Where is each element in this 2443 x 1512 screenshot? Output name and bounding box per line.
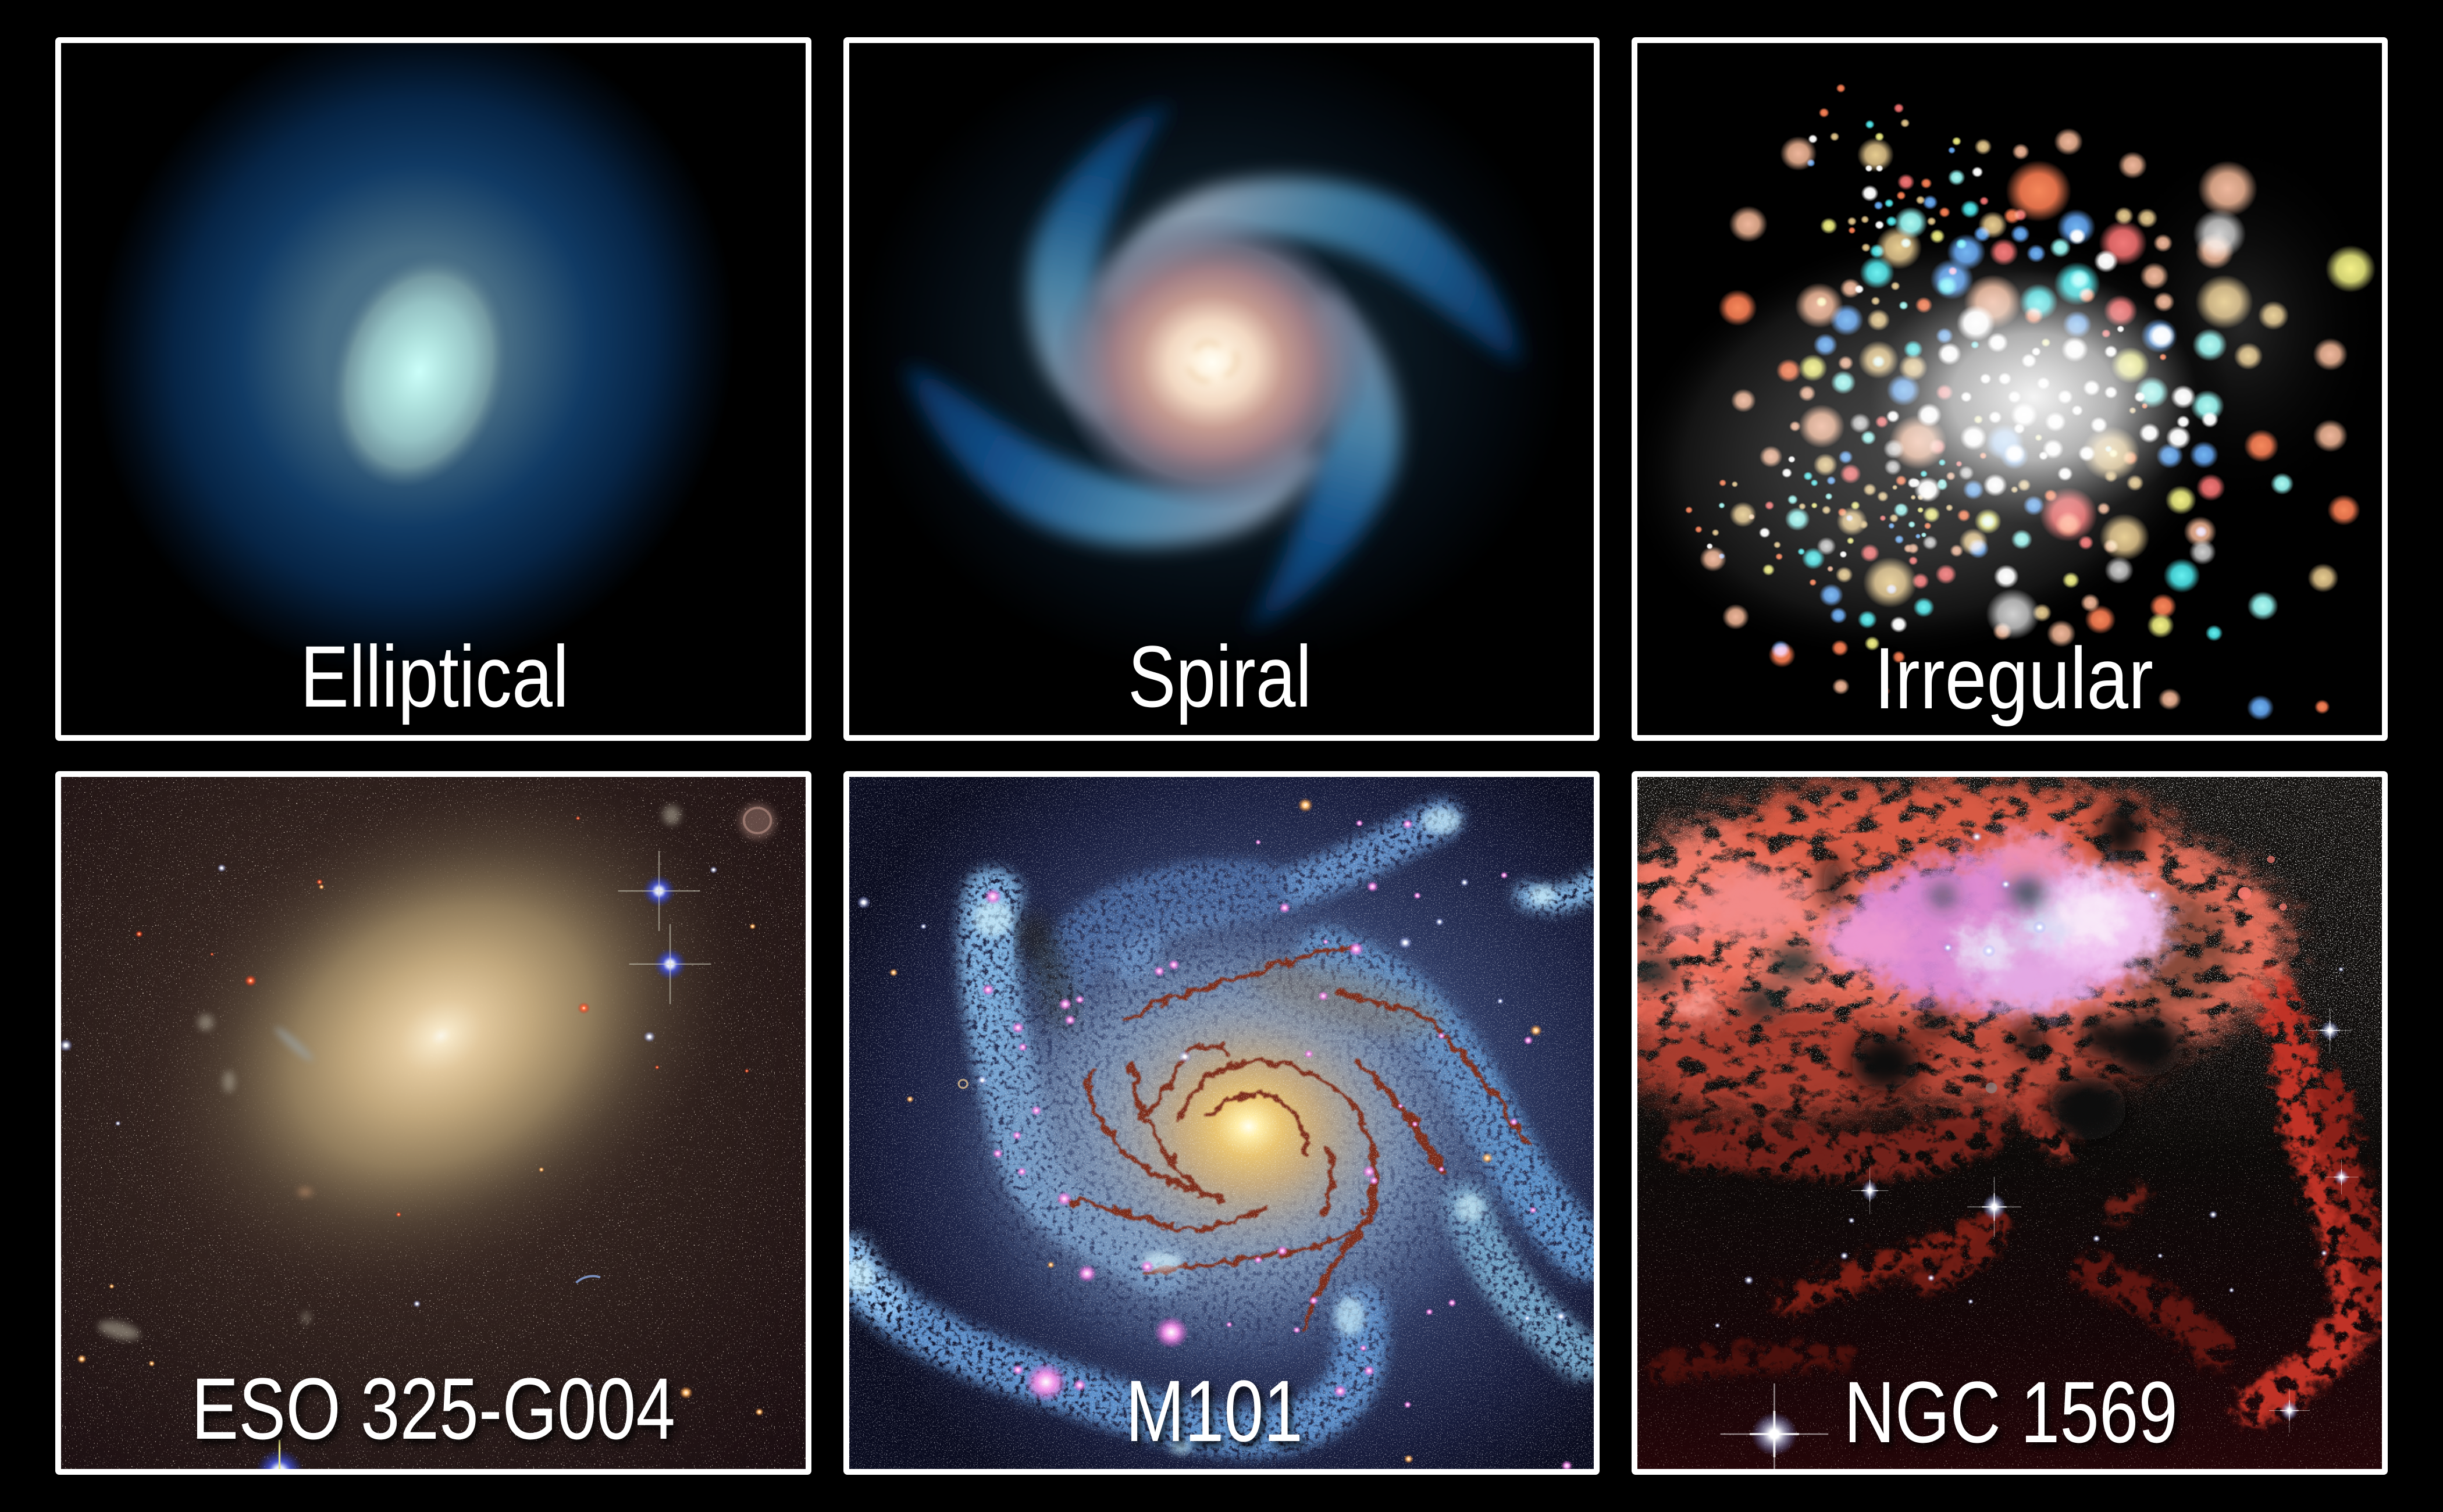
blue foreground stars [618, 851, 700, 931]
label: Irregular: Irregular [1874, 629, 2153, 727]
frame [58, 40, 809, 738]
frame [846, 774, 1597, 1472]
frame [58, 774, 809, 1472]
label: M101: M101 [1126, 1362, 1303, 1460]
panel: NGC 1569 photo [1557, 774, 2385, 1485]
panel: M101 photo [845, 774, 1597, 1472]
label: NGC 1569: NGC 1569 [1844, 1363, 2178, 1461]
label: ESO 325-G004: ESO 325-G004 [191, 1360, 675, 1457]
dark dust patch [1027, 918, 1070, 1027]
coral nebula [1557, 783, 2291, 1122]
dark gaps [1630, 805, 2184, 1140]
photo: pinwheel spiral galaxy [845, 798, 1596, 1471]
panel: elliptical model [29, 0, 809, 738]
label: Elliptical: Elliptical [300, 627, 569, 725]
pink star-forming knots [982, 819, 1573, 1471]
faint red filaments [1664, 990, 2373, 1407]
panel: ESO 325-G004 photo [32, 667, 850, 1493]
panel: spiral model [846, 28, 1597, 738]
photo: nebula [1557, 783, 2373, 1485]
frame [1634, 40, 2385, 738]
dense star noise [1637, 777, 2382, 1469]
frame [1634, 774, 2385, 1472]
foreground stars [889, 798, 1542, 1464]
bright stars with spikes [1851, 1167, 1889, 1214]
star field noise [849, 777, 1594, 1469]
illustration: blue elliptical galaxy [106, 43, 724, 665]
panel: irregular model [1573, 40, 2386, 738]
label: Spiral: Spiral [1128, 627, 1312, 725]
photo: elliptical galaxy glow and objects [32, 667, 850, 1493]
galaxy core [1085, 982, 1412, 1271]
illustration: blue spiral galaxy [856, 28, 1569, 675]
arm: lower right [1248, 288, 1400, 630]
outer blue arms [853, 819, 1596, 1432]
galaxy core [1053, 215, 1372, 511]
star field noise [61, 777, 806, 1469]
frame [846, 40, 1597, 738]
arm: lower left [906, 365, 1319, 547]
pink core [1658, 832, 2170, 1022]
blue-white clusters [845, 808, 1555, 1454]
sparse star noise [1637, 777, 2382, 1469]
arm: upper left [1028, 105, 1171, 423]
inner disc [949, 887, 1519, 1375]
arm: upper right [1099, 178, 1519, 365]
dust lanes [1060, 946, 1528, 1330]
illustration: irregular star blobs [1573, 84, 2386, 721]
small background galaxies [96, 804, 776, 1343]
